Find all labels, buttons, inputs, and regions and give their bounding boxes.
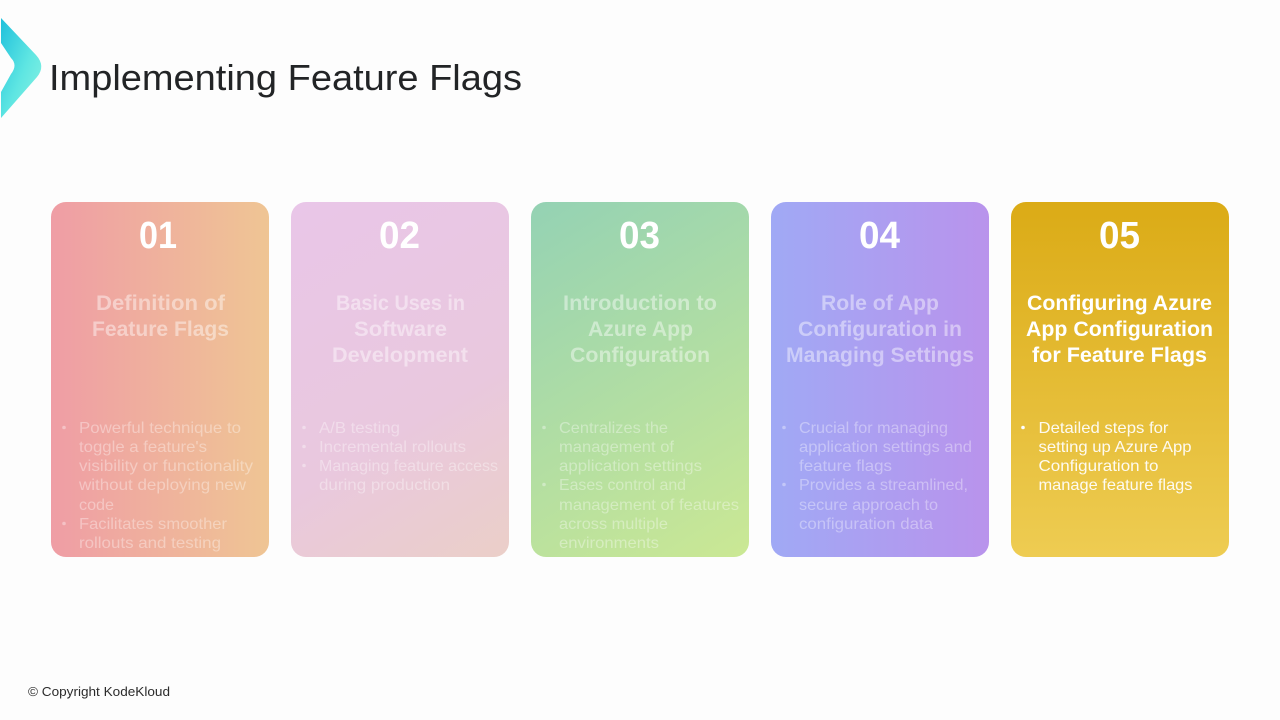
panel: 03 Introduction to Azure App Configuration bbox=[531, 202, 749, 557]
heading bbox=[563, 292, 717, 367]
heading bbox=[786, 292, 974, 367]
heading: Managing Settings bbox=[786, 344, 974, 367]
icon: logo chevron bbox=[1, 18, 41, 118]
bullet list bbox=[782, 420, 972, 533]
bullet list: Provides a streamlined, bbox=[799, 477, 968, 494]
heading: Feature Flags bbox=[92, 318, 229, 341]
panel: 05 Configuring Azure App Configuration for Feature Flags bbox=[1011, 202, 1229, 557]
heading: App Configuration bbox=[1026, 318, 1213, 341]
bullet list bbox=[62, 420, 253, 552]
bullet list: Centralizes the bbox=[559, 420, 668, 437]
panel: 01 Definition of Feature Flags bbox=[51, 202, 269, 557]
bullet list: application settings bbox=[559, 458, 702, 475]
bullet list: Detailed steps for bbox=[1038, 420, 1169, 437]
heading: Configuration bbox=[570, 344, 710, 367]
bullet list: management of features bbox=[559, 497, 739, 514]
bullet list: code bbox=[79, 497, 114, 514]
bullet list: application settings and bbox=[799, 439, 972, 456]
heading: Configuration in bbox=[798, 318, 962, 341]
bullet list bbox=[302, 420, 498, 494]
heading bbox=[1026, 292, 1213, 367]
number 05: 05 bbox=[1099, 215, 1140, 257]
bullet list: Facilitates smoother bbox=[79, 516, 228, 533]
heading: Basic Uses in bbox=[336, 292, 465, 315]
bullet list: Powerful technique to bbox=[79, 420, 241, 437]
bullet list bbox=[542, 420, 739, 552]
heading: Definition of bbox=[96, 292, 226, 315]
heading bbox=[332, 292, 468, 367]
number 02: 02 bbox=[379, 215, 420, 257]
panel: 02 Basic Uses in Software Development bbox=[291, 202, 509, 557]
bullet list: Crucial for managing bbox=[799, 420, 948, 437]
bullet list: configuration data bbox=[799, 516, 933, 533]
bullet list bbox=[1021, 420, 1192, 494]
bullet list: Incremental rollouts bbox=[319, 439, 466, 456]
heading: Introduction to bbox=[563, 292, 717, 315]
bullet list: Configuration to bbox=[1038, 458, 1159, 475]
bullet list: toggle a feature's bbox=[79, 439, 207, 456]
number 04: 04 bbox=[859, 215, 900, 257]
bullet list: setting up Azure App bbox=[1038, 439, 1192, 456]
heading: for Feature Flags bbox=[1032, 344, 1207, 367]
heading: Development bbox=[332, 344, 468, 367]
heading: Role of App bbox=[821, 292, 939, 315]
title: Implementing Feature Flags bbox=[49, 57, 522, 98]
bullet list: secure approach to bbox=[799, 497, 938, 514]
bullet list: A/B testing bbox=[319, 420, 400, 437]
bullet list: management of bbox=[559, 439, 675, 456]
heading: Configuring Azure bbox=[1027, 292, 1212, 315]
number 01: 01 bbox=[139, 215, 177, 257]
number 03: 03 bbox=[619, 215, 660, 257]
bullet list: environments bbox=[559, 535, 659, 552]
bullet list: Managing feature access bbox=[319, 458, 498, 475]
bullet list: without deploying new bbox=[78, 477, 246, 494]
heading: Software bbox=[354, 318, 447, 341]
footer copyright: © Copyright KodeKloud bbox=[28, 684, 170, 699]
bullet list: across multiple bbox=[559, 516, 668, 533]
bullet list: during production bbox=[319, 477, 450, 494]
bullet list: visibility or functionality bbox=[79, 458, 253, 475]
heading: Azure App bbox=[588, 318, 693, 341]
bullet list: manage feature flags bbox=[1038, 477, 1192, 494]
bullet list: rollouts and testing bbox=[79, 535, 221, 552]
bullet list: feature flags bbox=[799, 458, 892, 475]
bullet list: Eases control and bbox=[559, 477, 686, 494]
heading bbox=[92, 292, 229, 341]
panel: 04 Role of App Configuration in Managing Settings bbox=[771, 202, 989, 557]
